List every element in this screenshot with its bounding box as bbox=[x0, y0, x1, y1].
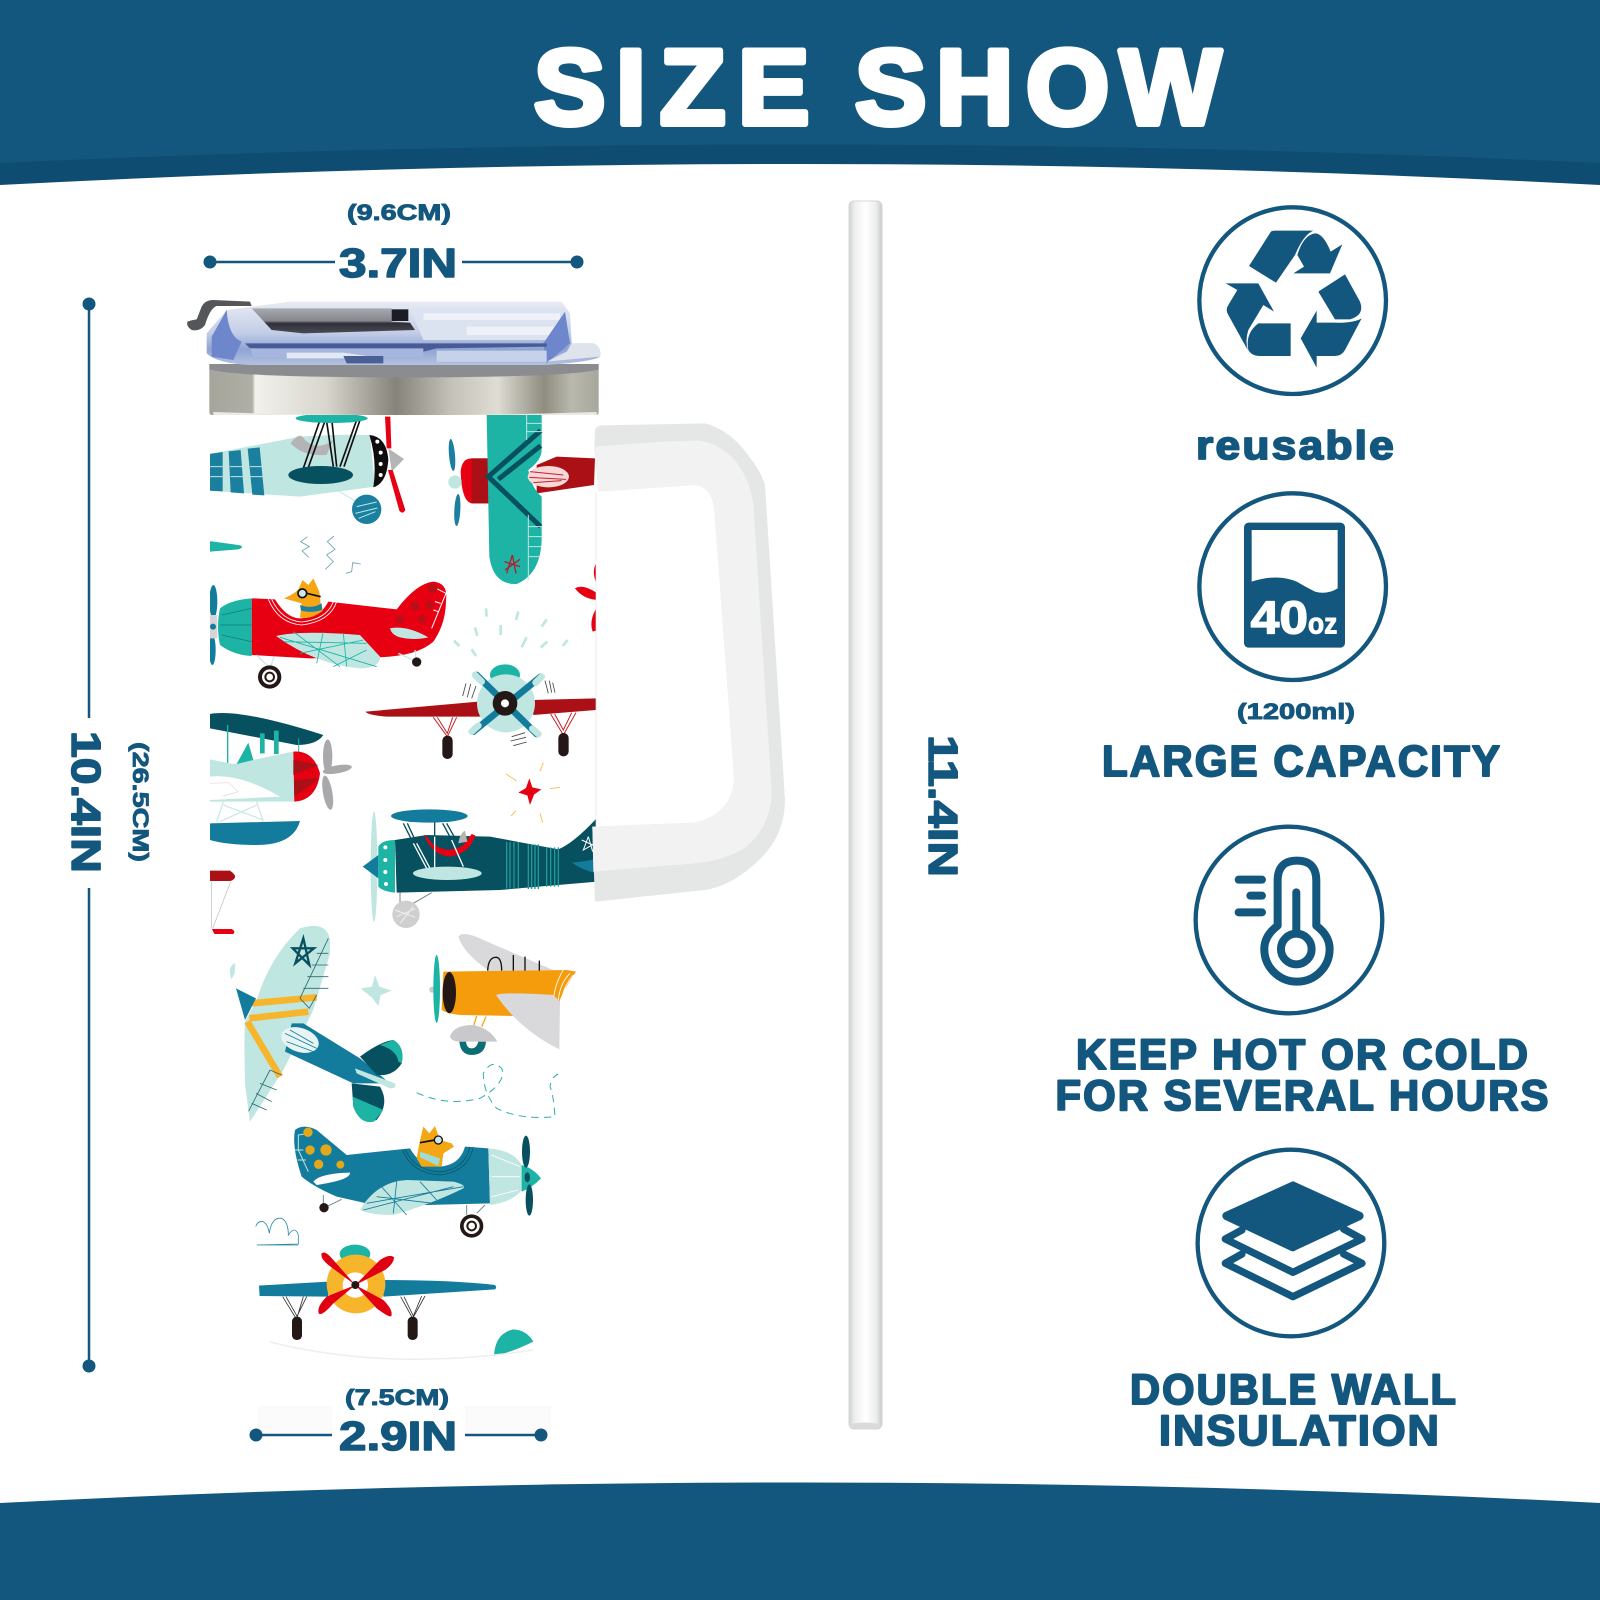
middle pattern planes bbox=[209, 561, 598, 934]
top width dimension bbox=[204, 200, 584, 286]
tumbler base edge bbox=[270, 1342, 533, 1359]
icon: recycle bbox=[1199, 207, 1386, 394]
red propeller fragment bbox=[575, 564, 596, 632]
label: reusable: reusable bbox=[1196, 424, 1396, 468]
icon: thermometer bbox=[1196, 827, 1382, 1013]
icon: layers bbox=[1198, 1150, 1384, 1336]
title: SIZE SHOW bbox=[534, 27, 1221, 147]
lid latch bbox=[187, 300, 252, 330]
plane: top-down teal wing bbox=[448, 415, 595, 584]
tumbler pattern bbox=[209, 414, 598, 1356]
plane: pale biplane bbox=[209, 414, 405, 524]
tumbler lid bbox=[187, 300, 600, 415]
height dimension: 10.4IN bbox=[63, 731, 109, 873]
straw length label: 11.4IN bbox=[920, 735, 966, 877]
label: large capacity: LARGE CAPACITY bbox=[1102, 737, 1502, 786]
label: double wall: DOUBLE WALL bbox=[1130, 1366, 1458, 1414]
top width dimension: 3.7IN bbox=[339, 240, 457, 286]
clear lid body bbox=[207, 302, 600, 365]
star burst bbox=[506, 763, 560, 823]
label: keep hot or cold: KEEP HOT OR COLD bbox=[1076, 1031, 1530, 1079]
icon: 40oz cup: oz bbox=[1308, 607, 1337, 640]
plane: red plane with fox pilot bbox=[209, 578, 446, 689]
tumbler handle bbox=[592, 423, 785, 902]
small wing tip and squiggles bbox=[209, 536, 361, 573]
straw bbox=[849, 201, 882, 1430]
plane: blue plane with fox pilot bbox=[294, 1126, 541, 1238]
plane fragment: teal wing tip bbox=[494, 1329, 533, 1356]
top width dimension: (9.6CM) bbox=[347, 200, 451, 225]
plane: orange plane bbox=[429, 934, 576, 1055]
cloud bbox=[255, 1218, 298, 1245]
feature: double wall insulation bbox=[1130, 1150, 1458, 1455]
icon: 40oz cup: 40 bbox=[1251, 591, 1308, 643]
decorative star bbox=[361, 975, 392, 1006]
lower pattern planes bbox=[228, 926, 576, 1356]
plane fragment: red wing edge bbox=[210, 871, 235, 934]
label: for several hours: FOR SEVERAL HOURS bbox=[1056, 1072, 1550, 1120]
bottom width dimension: 2.9IN bbox=[339, 1413, 457, 1459]
label: 1200ml: (1200ml) bbox=[1237, 699, 1355, 724]
plane: front view red wing bbox=[366, 608, 597, 759]
feature: reusable bbox=[1196, 207, 1396, 468]
icon: 40oz cup bbox=[1199, 493, 1386, 680]
plane: seaplane bbox=[210, 713, 352, 845]
footer banner bbox=[0, 1482, 1600, 1600]
label: insulation: INSULATION bbox=[1159, 1407, 1441, 1455]
plane: front view yellow bbox=[257, 1245, 496, 1340]
steel ring bbox=[209, 364, 599, 415]
upper pattern planes bbox=[209, 414, 595, 584]
header banner bbox=[0, 0, 1600, 185]
feature: keep hot or cold bbox=[1056, 827, 1550, 1120]
height dimension: (26.5CM) bbox=[128, 742, 153, 862]
dashed flight path bbox=[417, 1064, 558, 1117]
bottom width dimension bbox=[250, 1385, 551, 1459]
plane: dark green biplane bbox=[363, 809, 597, 928]
plane: diagonal teal plane bbox=[228, 926, 402, 1122]
feature: large capacity bbox=[1102, 493, 1502, 786]
height dimension bbox=[63, 298, 153, 1372]
bottom width dimension: (7.5CM) bbox=[345, 1385, 449, 1410]
